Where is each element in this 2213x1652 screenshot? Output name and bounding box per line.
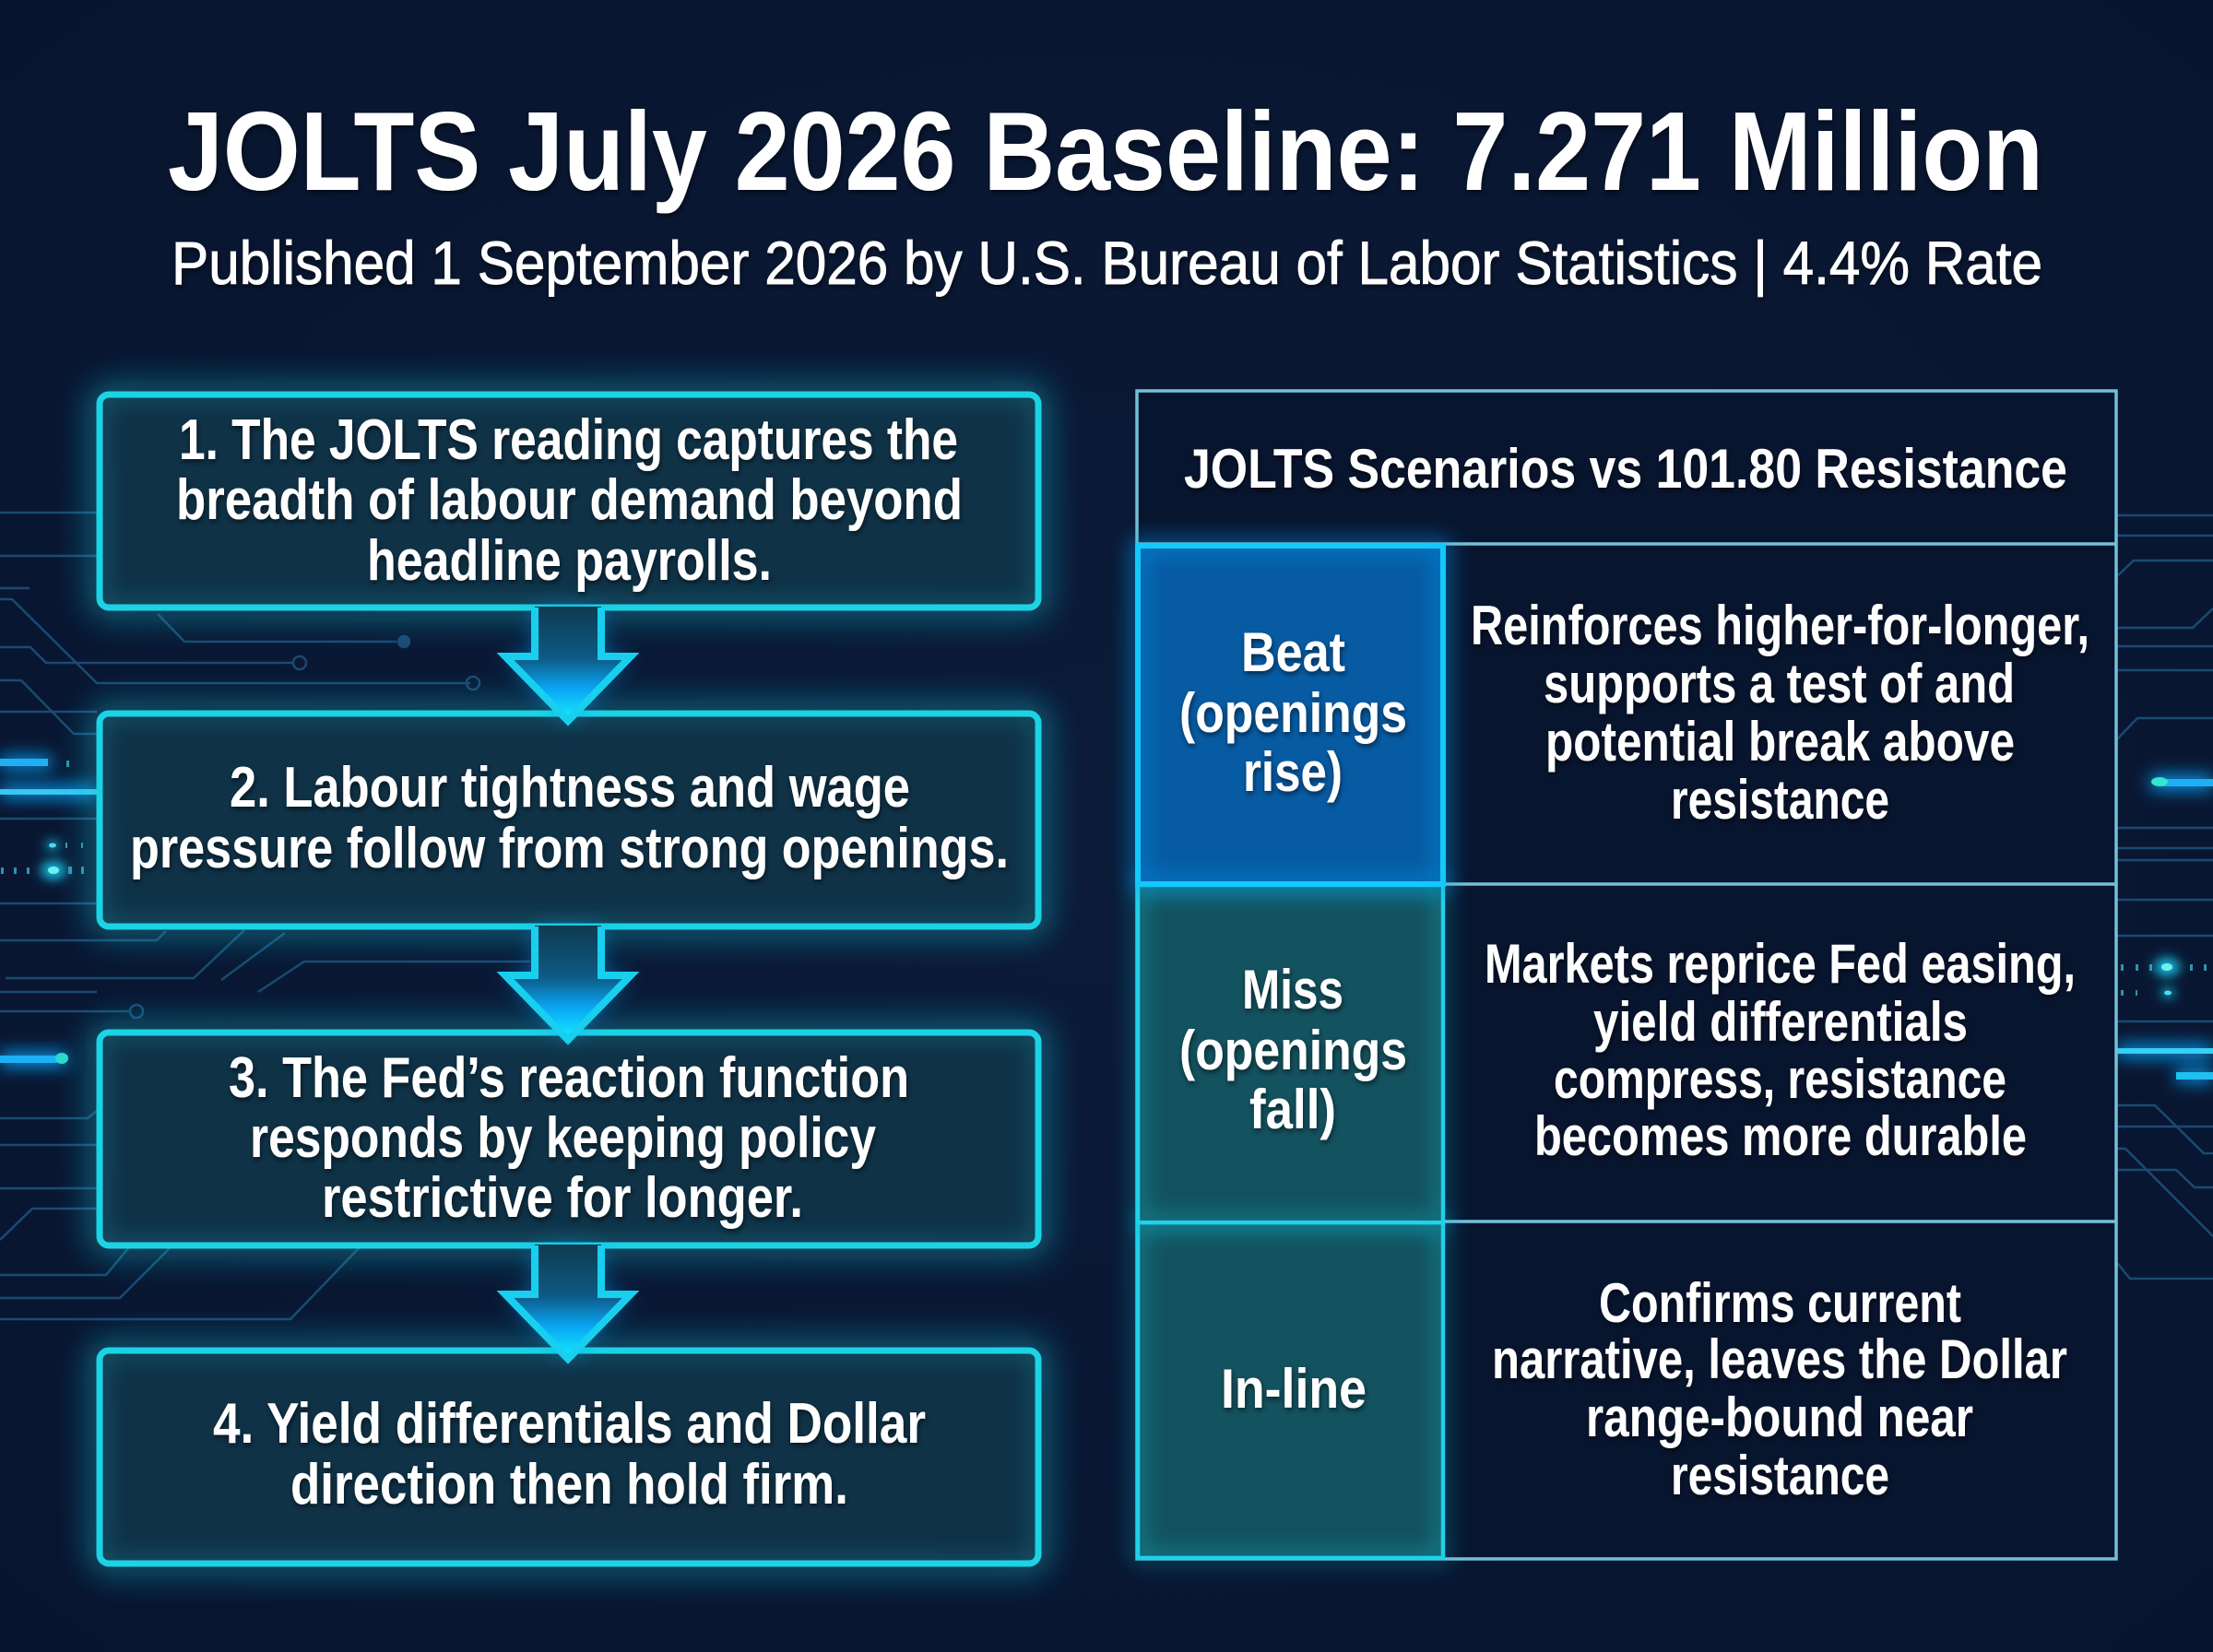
beat outcome text: Reinforces higher-for-longer, bbox=[1471, 595, 2089, 656]
miss outcome text bbox=[1485, 933, 2076, 1167]
right circuit background bbox=[2117, 515, 2213, 1279]
step 4 box bbox=[100, 1351, 1038, 1564]
panel: scenarios table bbox=[1137, 391, 2116, 1559]
miss outcome text: Markets reprice Fed easing, bbox=[1485, 933, 2076, 995]
faint circuit traces behind table bbox=[1775, 608, 2117, 1014]
step 1 box: headline payrolls. bbox=[367, 529, 772, 593]
in-line outcome text bbox=[1492, 1272, 2067, 1506]
in-line outcome text: resistance bbox=[1671, 1445, 1889, 1506]
row: beat label cell bbox=[1138, 546, 1443, 884]
arrow 1 to 2 bbox=[505, 607, 631, 721]
table background bbox=[1137, 391, 2116, 1559]
table heading: JOLTS Scenarios vs 101.80 Resistance bbox=[1184, 438, 2067, 500]
step 2 box: 2. Labour tightness and wage bbox=[230, 756, 910, 820]
step 3 box bbox=[100, 1032, 1038, 1245]
beat outcome text: resistance bbox=[1671, 769, 1889, 831]
row: beat label cell: Beat bbox=[1241, 621, 1345, 683]
arrow 3 to 4 bbox=[505, 1245, 631, 1359]
step 1 box: breadth of labour demand beyond bbox=[176, 468, 963, 532]
row: in-line label cell: In-line bbox=[1221, 1358, 1367, 1420]
in-line outcome text: Confirms current bbox=[1599, 1272, 1961, 1334]
step 1 box: 1. The JOLTS reading captures the bbox=[179, 408, 958, 472]
glowing light streaks bbox=[0, 756, 2213, 1082]
row: miss label cell: (openings bbox=[1179, 1020, 1407, 1081]
step 1 box bbox=[100, 395, 1038, 608]
beat outcome text: supports a test of and bbox=[1544, 653, 2015, 714]
step 3 box: responds by keeping policy bbox=[250, 1106, 876, 1170]
glowing dot clusters bbox=[1, 761, 2207, 997]
miss outcome text: becomes more durable bbox=[1534, 1105, 2027, 1167]
table grid bbox=[1137, 391, 2116, 1559]
step 2 box: pressure follow from strong openings. bbox=[130, 817, 1009, 880]
in-line outcome text: narrative, leaves the Dollar bbox=[1492, 1328, 2067, 1390]
beat outcome text: potential break above bbox=[1545, 711, 2015, 773]
in-line outcome text: range-bound near bbox=[1586, 1386, 1973, 1448]
beat outcome text bbox=[1471, 595, 2089, 831]
subtitle: Published 1 September 2026 by U.S. Bureau of Labor Statistics | 4.4% Rate bbox=[172, 229, 2042, 297]
step 2 box bbox=[100, 714, 1038, 926]
step 3 box: 3. The Fed’s reaction function bbox=[229, 1046, 909, 1110]
step 3 box: restrictive for longer. bbox=[322, 1166, 803, 1230]
row: beat label cell: rise) bbox=[1243, 741, 1343, 803]
left circuit background bbox=[0, 513, 530, 1319]
step 4 box: 4. Yield differentials and Dollar bbox=[213, 1392, 926, 1456]
row: miss label cell: Miss bbox=[1242, 959, 1343, 1021]
row: beat label cell: (openings bbox=[1179, 682, 1407, 744]
miss outcome text: yield differentials bbox=[1593, 991, 1968, 1053]
row: miss label cell: fall) bbox=[1249, 1079, 1336, 1140]
arrow 2 to 3 bbox=[505, 926, 631, 1040]
step 4 box: direction then hold firm. bbox=[290, 1453, 848, 1516]
miss outcome text: compress, resistance bbox=[1554, 1048, 2006, 1110]
row: miss label cell bbox=[1138, 885, 1443, 1222]
row: in-line label cell bbox=[1138, 1222, 1443, 1558]
panel: causal chain flow bbox=[100, 395, 1038, 1564]
